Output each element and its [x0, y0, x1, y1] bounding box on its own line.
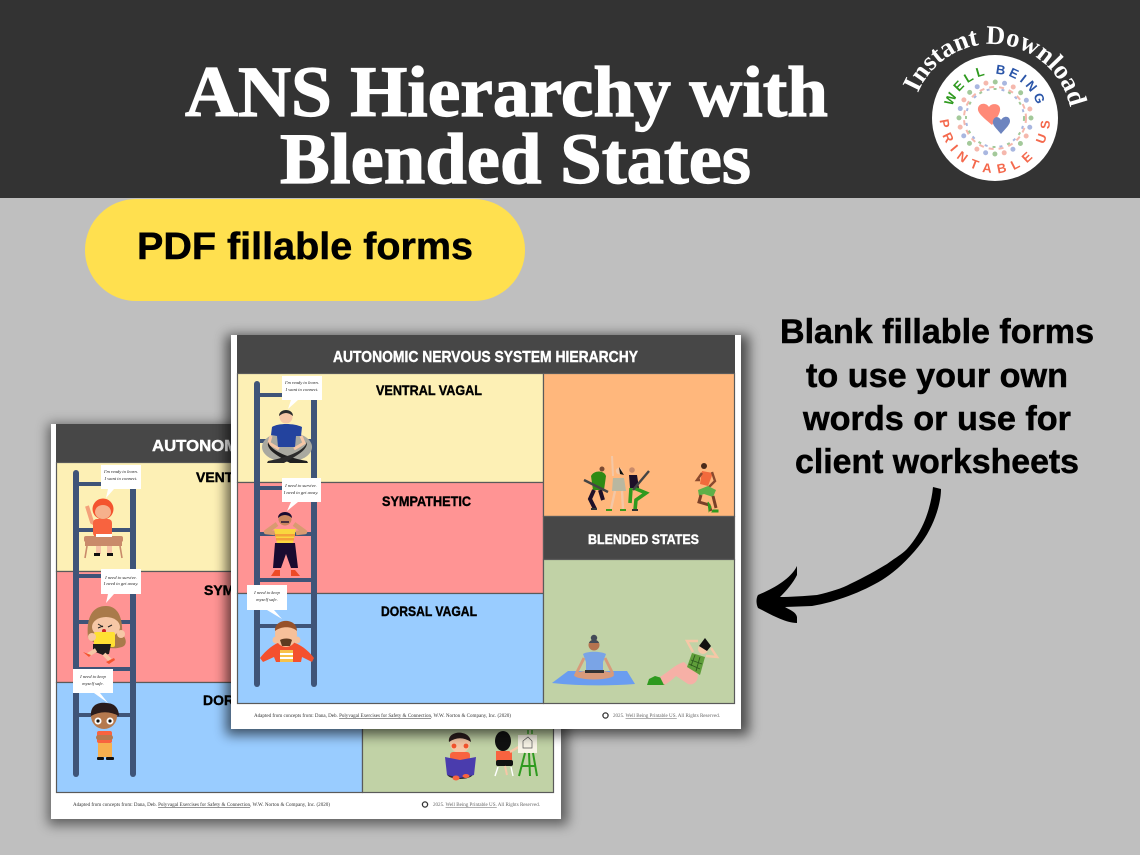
worksheet: front page [226, 335, 749, 735]
back page ladder [76, 473, 133, 774]
panel heading: ventral vagal: VENTRAL VAGAL [376, 382, 482, 398]
front page citation [254, 712, 720, 719]
figure: stressed man [266, 512, 305, 576]
title: ANS Hierarchy with [185, 52, 828, 132]
figure: runner [697, 463, 718, 512]
title [185, 52, 828, 199]
front page header [237, 335, 735, 373]
callout text: words or use for [802, 400, 1071, 438]
back speech text: I need to keep [79, 674, 107, 679]
speech bubble text: I'm ready to learn. [284, 380, 319, 385]
speech bubble text [253, 380, 319, 602]
back figure: boy reading [445, 733, 476, 780]
worksheet: back page [48, 424, 568, 825]
arrow pointing to worksheet [756, 487, 941, 623]
front page ladder [257, 384, 314, 684]
callout text: to use your own [806, 357, 1068, 395]
figure: woman meditating on mat [552, 635, 635, 685]
back figure: upset child [83, 606, 126, 664]
speech bubble text: I want to connect. [285, 387, 318, 392]
speech bubble text: I need to survive. [284, 483, 317, 488]
callout text: Blank fillable forms [780, 313, 1094, 351]
front page citation: Adapted from concepts from: Dana, Deb. Polyvagal Exercises for Safety & Connection, W.W. Norton & Company, Inc. (2020) [254, 712, 511, 719]
back page header [56, 424, 554, 462]
back page citation [73, 801, 540, 808]
back page state labels: DORSAL VAGAL [203, 692, 314, 708]
figure: seated man on beanbag [262, 410, 312, 463]
back figure: child arms crossed [91, 703, 119, 760]
front page header: AUTONOMIC NERVOUS SYSTEM HIERARCHY [333, 349, 638, 366]
back speech text: I want to connect. [104, 476, 137, 481]
speech bubbles [247, 376, 322, 619]
back page state labels [196, 469, 314, 708]
front page panels [238, 374, 734, 704]
panel heading: blended states: BLENDED STATES [588, 531, 699, 547]
panel heading: sympathetic: SYMPATHETIC [382, 493, 471, 509]
back speech text: I need to get away. [103, 581, 138, 586]
speech bubble text: I need to get away. [283, 490, 318, 495]
header band [0, 0, 1140, 198]
badge: instant download logo: PRINTABLE US [940, 119, 1050, 174]
title: Blended States [280, 119, 751, 199]
back figure: girl painting [495, 730, 537, 776]
front page citation: 2025. Well Being Printable US. All Rights Reserved. [613, 713, 720, 719]
back page panels [56, 462, 554, 792]
back page state labels: VENTRAL VAGAL [196, 469, 314, 485]
badge: instant download logo: WELL BEING [944, 64, 1044, 104]
back page state labels: SYMPATHETIC [204, 582, 302, 598]
figure group: band dancers [584, 456, 649, 511]
back page citation: 2025. Well Being Printable US. All Rights Reserved. [433, 802, 540, 808]
pill badge: PDF fillable forms: PDF fillable forms [137, 226, 473, 268]
back speech text [79, 469, 138, 686]
back speech text: myself safe. [82, 681, 104, 686]
back speech text: I'm ready to learn. [103, 469, 138, 474]
badge: instant download logo [902, 26, 1088, 181]
speech bubble text: myself safe. [256, 597, 278, 602]
callout text [780, 313, 1094, 481]
back figure: child at desk [84, 498, 123, 558]
callout text: client worksheets [795, 443, 1079, 481]
badge: instant download logo: Instant Download [902, 26, 1088, 107]
back page header: AUTONOMIC NERVOUS [152, 438, 342, 455]
figure: exhausted man [260, 621, 314, 662]
back speech bubbles [73, 465, 141, 703]
figure: woman doing sit-ups [647, 638, 717, 685]
panel heading: dorsal vagal: DORSAL VAGAL [381, 603, 477, 619]
pill badge: PDF fillable forms [85, 199, 525, 301]
back speech text: I need to survive. [104, 575, 137, 580]
speech bubble text: I need to keep [253, 590, 281, 595]
back page citation: Adapted from concepts from: Dana, Deb. Polyvagal Exercises for Safety & Connection, W.W. Norton & Company, Inc. (2020) [73, 801, 330, 808]
